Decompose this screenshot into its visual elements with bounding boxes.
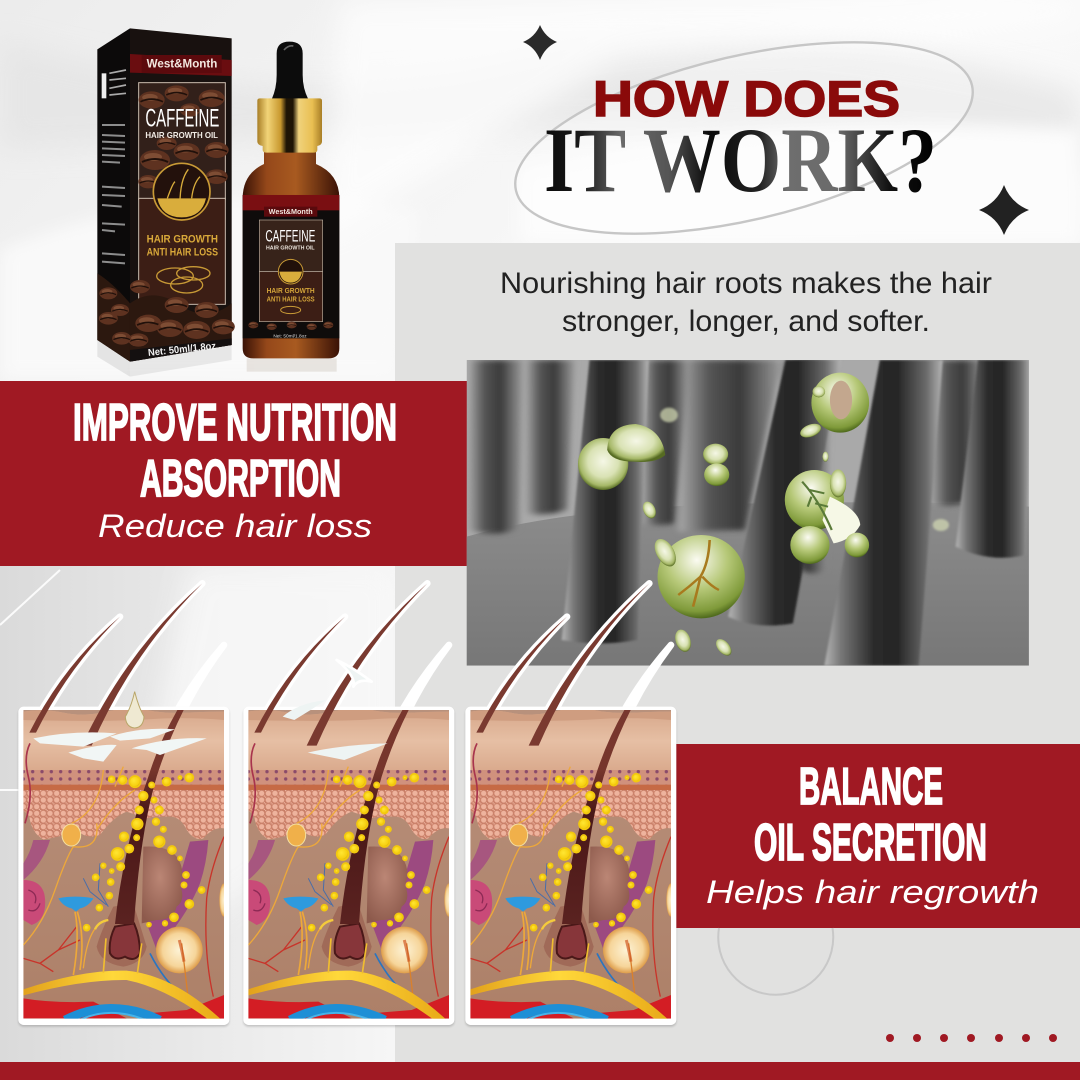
bottle label: West&Month	[269, 209, 313, 216]
decorative circle outline	[718, 928, 833, 995]
intro text block	[500, 267, 992, 338]
intro text block: Nourishing hair roots makes the hair	[500, 267, 992, 300]
box front face: West&Month	[147, 56, 217, 70]
bottle label: Net: 50ml/1.8oz	[273, 333, 307, 338]
bottle label: ANTI HAIR LOSS	[267, 297, 315, 304]
red band: balance oil secretion	[675, 744, 1080, 928]
red band: improve nutrition: IMPROVE NUTRITION	[73, 394, 397, 452]
skin card: stage 2 with fewer flakes	[243, 583, 454, 1027]
icon: small sparkle star	[523, 25, 557, 60]
box front face: HAIR GROWTH OIL	[145, 130, 219, 140]
flakes	[283, 660, 388, 760]
intro text block: stronger, longer, and softer.	[562, 305, 930, 338]
blurred background hair	[467, 360, 985, 573]
red band: improve nutrition: Reduce hair loss	[98, 508, 372, 544]
box front face	[130, 28, 232, 362]
red band: improve nutrition	[0, 381, 467, 566]
box side face	[97, 28, 130, 362]
decorative ellipse outline	[498, 5, 990, 271]
icon: large sparkle star	[979, 185, 1029, 235]
red band: balance oil secretion: BALANCE	[799, 758, 943, 816]
red band: improve nutrition: ABSORPTION	[140, 450, 341, 508]
title line: it work: IT WORK?	[544, 109, 937, 211]
skin card: stage 3 clear scalp	[465, 583, 676, 1027]
box front face: CAFFEINE	[145, 105, 219, 132]
oil droplet	[125, 692, 144, 728]
oil droplets	[578, 373, 949, 658]
bottle label: HAIR GROWTH	[267, 288, 315, 295]
coffee beans at box base	[97, 273, 235, 362]
skin card: stage 1 with heavy flakes	[18, 583, 229, 1027]
title	[544, 71, 937, 211]
coffee beans at box base: Net: 50ml/1.8oz	[147, 341, 217, 359]
grey content panel	[395, 243, 1080, 1062]
foreground hair shafts	[562, 360, 1031, 666]
bottom red bar	[0, 1062, 1080, 1080]
product: box and bottle	[97, 28, 339, 377]
box front face: HAIR GROWTH	[147, 234, 218, 246]
bottle label: CAFFEINE	[265, 226, 315, 245]
bottle label	[243, 195, 339, 338]
red band: balance oil secretion: Helps hair regrowth	[706, 874, 1039, 910]
bottle dropper	[272, 42, 308, 99]
product reflection	[97, 340, 337, 377]
box front face: ANTI HAIR LOSS	[147, 246, 218, 258]
bottle glass	[243, 150, 339, 358]
photo backdrop and scalp	[467, 360, 1029, 666]
bottle label: HAIR GROWTH OIL	[266, 245, 315, 251]
dandruff flakes	[33, 729, 207, 762]
bottle gold collar	[257, 98, 322, 153]
photo: hair shafts and oil droplets	[467, 360, 1031, 666]
title line: how does: HOW DOES	[593, 71, 900, 127]
decorative red dots	[886, 1034, 1057, 1042]
